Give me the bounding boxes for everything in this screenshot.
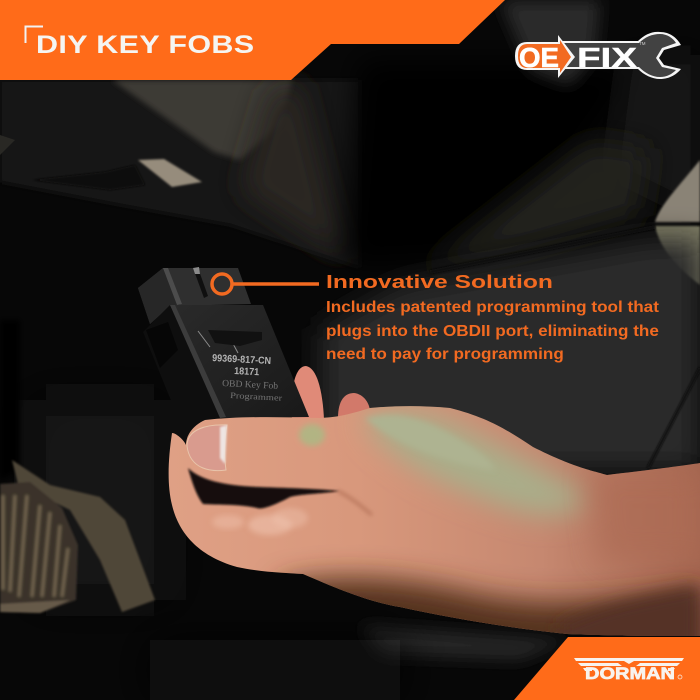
top-left orange banner bbox=[0, 0, 505, 80]
logo: OE FIX: TM bbox=[639, 41, 646, 46]
logo: OE FIX bbox=[515, 32, 681, 79]
OBDII programmer bbox=[138, 267, 309, 447]
callout heading: Innovative Solution bbox=[326, 271, 553, 292]
title: DIY KEY FOBS bbox=[36, 31, 255, 59]
logo: OE FIX: FIX bbox=[577, 42, 637, 73]
thumbnail bbox=[187, 425, 227, 471]
bottom-right orange corner bbox=[514, 637, 700, 700]
logo: Dorman bbox=[574, 658, 684, 683]
green light patches bbox=[362, 411, 590, 515]
title bracket bbox=[26, 26, 43, 43]
floor and carpet areas bbox=[0, 227, 700, 700]
wrench and bar fill bbox=[560, 34, 676, 77]
callout pointer bbox=[212, 274, 319, 294]
callout body text: need to pay for programming bbox=[326, 346, 564, 363]
OBDII programmer: OBD Key Fob bbox=[222, 379, 279, 392]
logo: Dorman: DORMAN bbox=[585, 664, 675, 683]
arrow fill bbox=[518, 40, 571, 73]
bottom shadow bbox=[280, 578, 700, 660]
light panel at right edge bbox=[655, 160, 700, 285]
callout body text: plugs into the OBDII port, eliminating the bbox=[326, 322, 659, 340]
arrow outline bbox=[515, 35, 575, 78]
dashboard lower trim bbox=[0, 0, 700, 272]
wrench and bar outline bbox=[560, 32, 681, 79]
wrist tone bbox=[586, 466, 682, 540]
pedals bbox=[0, 460, 155, 613]
callout body text bbox=[326, 299, 659, 363]
logo: OE FIX: OE bbox=[519, 42, 559, 73]
crease between thumb and finger bbox=[338, 491, 372, 515]
OBDII programmer: Programmer bbox=[230, 390, 283, 403]
OBDII programmer: 99369-817-CN bbox=[212, 353, 271, 367]
callout body text: Includes patented programming tool that bbox=[326, 299, 659, 316]
fingers behind programmer bbox=[292, 366, 370, 420]
shadow under thumb and gap bbox=[188, 468, 340, 508]
finger highlights bbox=[248, 515, 292, 535]
hand bbox=[168, 406, 700, 636]
OBDII programmer: 18171 bbox=[234, 366, 260, 378]
